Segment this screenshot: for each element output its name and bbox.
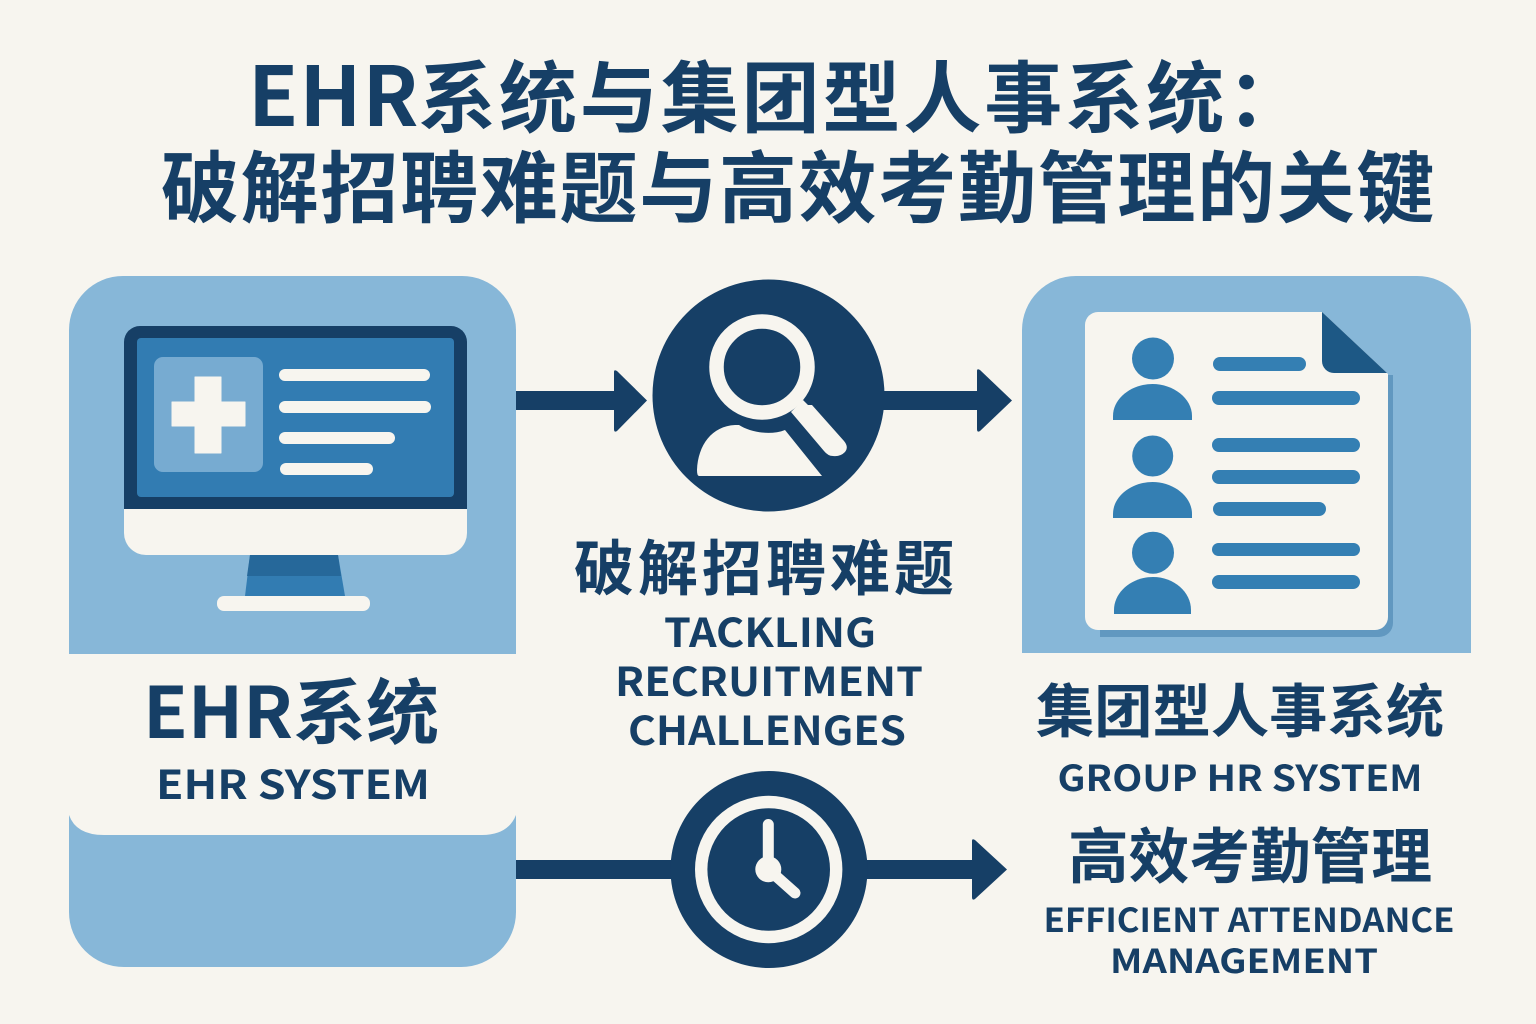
icon: magnifier over person [652,280,884,512]
title: 破解招聘难题与高效考勤管理的关键 [161,127,1436,239]
label: EHR system: EHR SYSTEM [156,753,430,811]
label: efficient attendance management: MANAGEMENT [1110,935,1378,983]
arrow: clock line [516,839,1007,900]
label: EHR system [143,657,439,811]
title: 系统与集团型人事系统： [418,37,1308,149]
label: tackling recruitment challenges: RECRUITMENT [615,650,923,708]
label: efficient attendance management [1044,809,1454,983]
icon: clock [670,771,868,968]
arrow: EHR to search [516,370,647,432]
title [161,31,1436,239]
arrow: search to group HR [880,369,1012,432]
label: efficient attendance management: 高效考勤管理 [1068,809,1432,896]
panel: group HR system [1022,276,1471,653]
panel: EHR system [69,276,516,967]
label: group HR system: GROUP HR SYSTEM [1058,750,1422,802]
label: group HR system [1036,665,1444,802]
label: tackling recruitment challenges: TACKLING [664,601,876,659]
icon: computer monitor [124,326,467,611]
label: EHR system: EHR系统 [143,657,439,759]
label: group HR system: 集团型人事系统 [1036,665,1444,749]
label: tackling recruitment challenges: 破解招聘难题 [574,521,958,608]
label: tackling recruitment challenges: CHALLENGES [628,699,906,757]
title: EHR [248,31,419,150]
label: tackling recruitment challenges [574,521,958,757]
label: efficient attendance management: EFFICIENT ATTENDANCE [1044,894,1454,942]
icon: employee document [1085,312,1393,637]
